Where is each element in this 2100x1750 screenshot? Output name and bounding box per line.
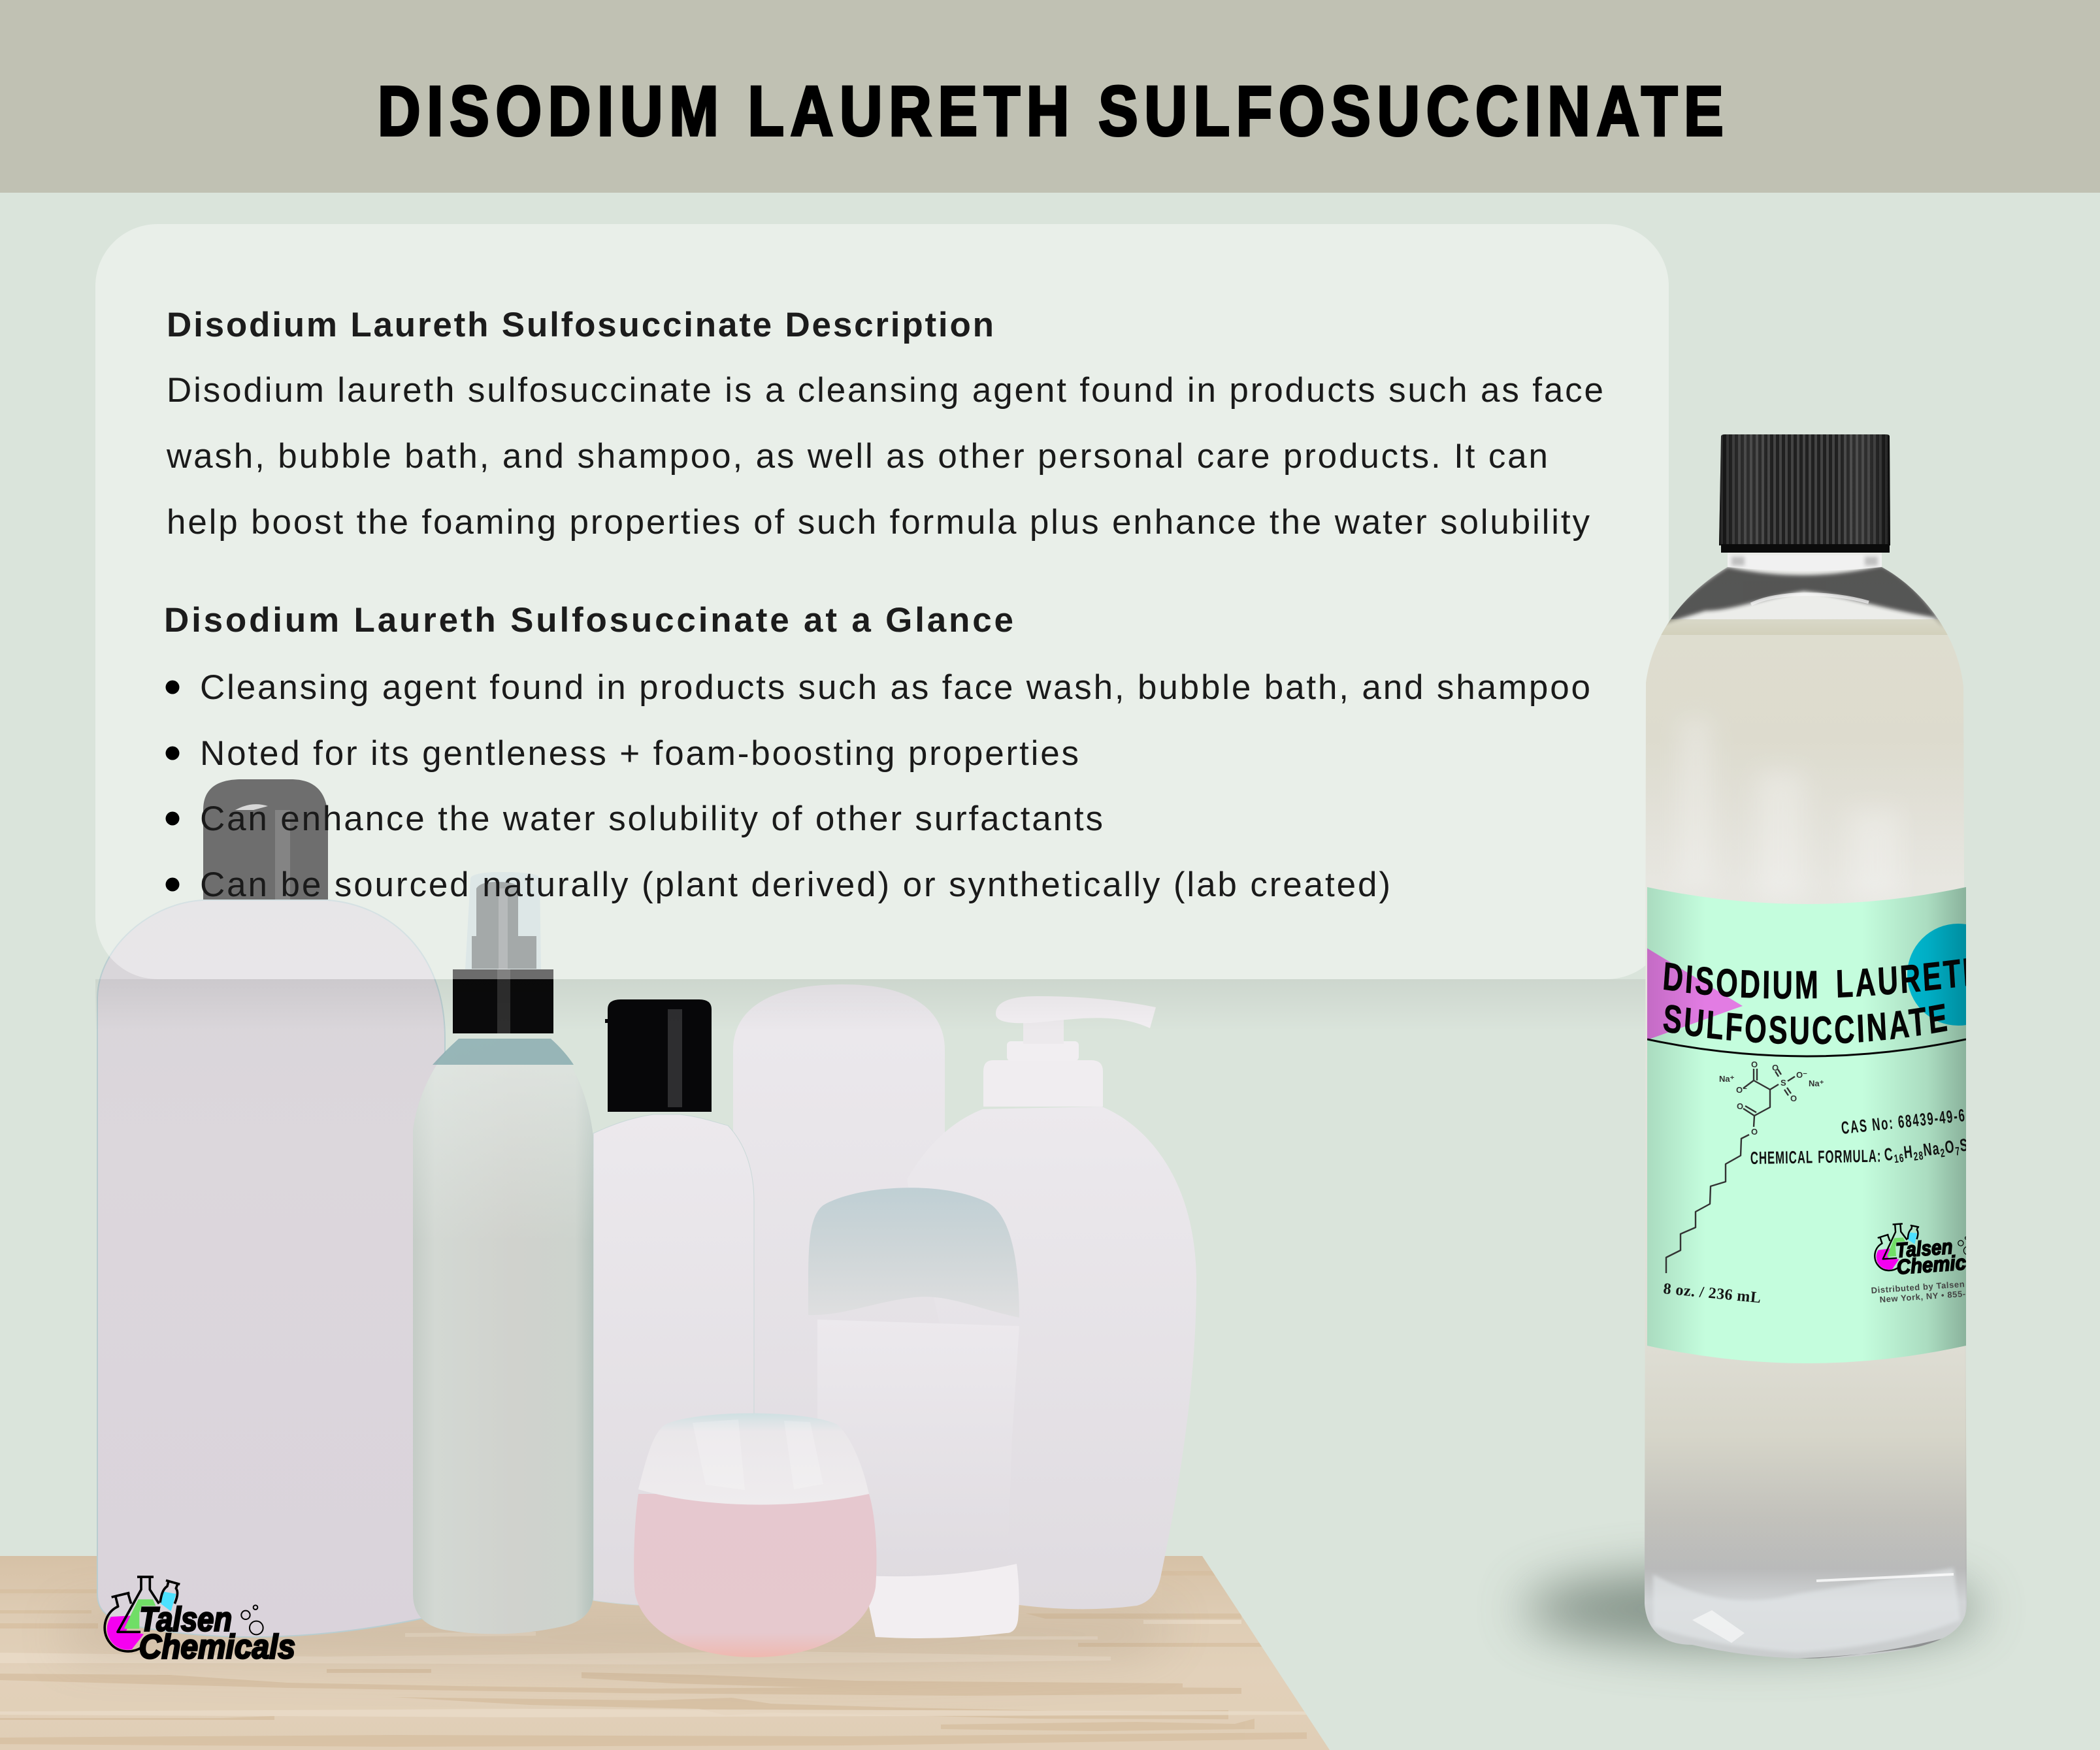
chemical structure: O [1772, 1063, 1779, 1073]
bullet list [166, 668, 1590, 904]
label triangle [1643, 946, 1743, 1041]
description paragraph: wash, bubble bath, and shampoo, as well as other personal care products. It can [166, 437, 1548, 476]
label chemical formula: H [1903, 1141, 1914, 1162]
product group: cosmetic containers [97, 779, 1196, 1657]
bullet list: Can enhance the water solubility of other surfactants [200, 800, 1103, 838]
label chemical formula: O [1944, 1136, 1956, 1157]
chemical structure: O [1751, 1060, 1758, 1069]
large white bottle [97, 900, 445, 1637]
label chemical formula: S [1959, 1135, 1970, 1156]
label chemical formula: 16 [1894, 1152, 1905, 1166]
description paragraph: help boost the foaming properties of such formula plus enhance the water solubility [167, 503, 1590, 542]
heading: description: Disodium Laureth Sulfosuccinate Description [167, 306, 994, 344]
label chemical formula: 28 [1913, 1149, 1925, 1163]
bullet list: Can be sourced naturally (plant derived) or synthetically (lab created) [200, 866, 1390, 904]
label logo [1874, 1223, 1966, 1275]
bottle with black flip cap [593, 999, 754, 1606]
large bottle cap [203, 779, 328, 915]
header band [0, 0, 2100, 193]
label product name [1664, 958, 1966, 1045]
panel shadow [95, 979, 1669, 1031]
bottle body [1633, 549, 1973, 1666]
chemical structure: O [1751, 1127, 1758, 1137]
logo: Talsen Chemicals: Chemicals [139, 1627, 295, 1665]
logo: Talsen Chemicals [105, 1577, 295, 1665]
description paragraph: Disodium laureth sulfosuccinate is a cleansing agent found in products such as face [167, 371, 1603, 410]
label chemical formula: C [1883, 1144, 1895, 1165]
label chemical formula: 7 [1955, 1145, 1961, 1158]
product label [1647, 887, 1966, 1363]
label logo: Chemicals [1895, 1248, 1993, 1279]
chemical structure: Na⁺ [1719, 1074, 1735, 1084]
label CAS number: CAS No: 68439-49-6 [1840, 1105, 1967, 1138]
deodorant stick [808, 1188, 1019, 1638]
label product name: DISODIUM LAURETH [1664, 958, 1966, 999]
title: DISODIUM LAURETH SULFOSUCCINATE [378, 73, 1724, 151]
spray bottle [413, 872, 593, 1634]
heading: at a glance: Disodium Laureth Sulfosuccinate at a Glance [164, 601, 1013, 640]
bullet list: Noted for its gentleness + foam-boosting properties [200, 734, 1079, 773]
chemical structure: O⁻ [1736, 1085, 1747, 1095]
label volume: 8 oz. / 236 mL [1662, 1280, 1762, 1306]
chemical structure: Na⁺ [1809, 1078, 1824, 1088]
label logo: Talsen [1895, 1235, 1954, 1262]
ground shadow of main bottle [1522, 1570, 1980, 1648]
wooden table [0, 1556, 1330, 1750]
description paragraph [166, 371, 1603, 542]
back white flat bottle [733, 984, 945, 1594]
pump bottle [907, 996, 1196, 1609]
chemical structure: S [1780, 1078, 1786, 1088]
logo: Talsen Chemicals: Talsen [139, 1600, 232, 1638]
bullet list: Cleansing agent found in products such as face wash, bubble bath, and shampoo [200, 668, 1590, 707]
label product name: SULFOSUCCINATE [1664, 1003, 1947, 1045]
chemical structure: O⁻ [1796, 1070, 1807, 1080]
label chemical formula [1751, 1139, 1966, 1164]
label chemical formula: Na [1922, 1138, 1941, 1160]
chemical structure: O [1790, 1094, 1797, 1103]
main product bottle [1645, 434, 1967, 1659]
shadow of products on table [65, 1613, 1176, 1666]
label distributor text: Distributed by Talsen Chemicals [1871, 1276, 2014, 1295]
bottle cap [1719, 434, 1890, 553]
label chemical formula: 2 [1940, 1146, 1946, 1160]
description panel [95, 224, 1669, 979]
label chemical formula: CHEMICAL FORMULA: [1750, 1146, 1882, 1168]
label circle [1907, 924, 1966, 1026]
cream jar [634, 1414, 877, 1657]
chemical structure: O [1737, 1101, 1743, 1111]
label distributor text: New York, NY • 855-94 [1879, 1288, 1977, 1304]
chemical structure [1666, 1060, 1824, 1273]
label distributor text [1871, 1282, 1965, 1303]
